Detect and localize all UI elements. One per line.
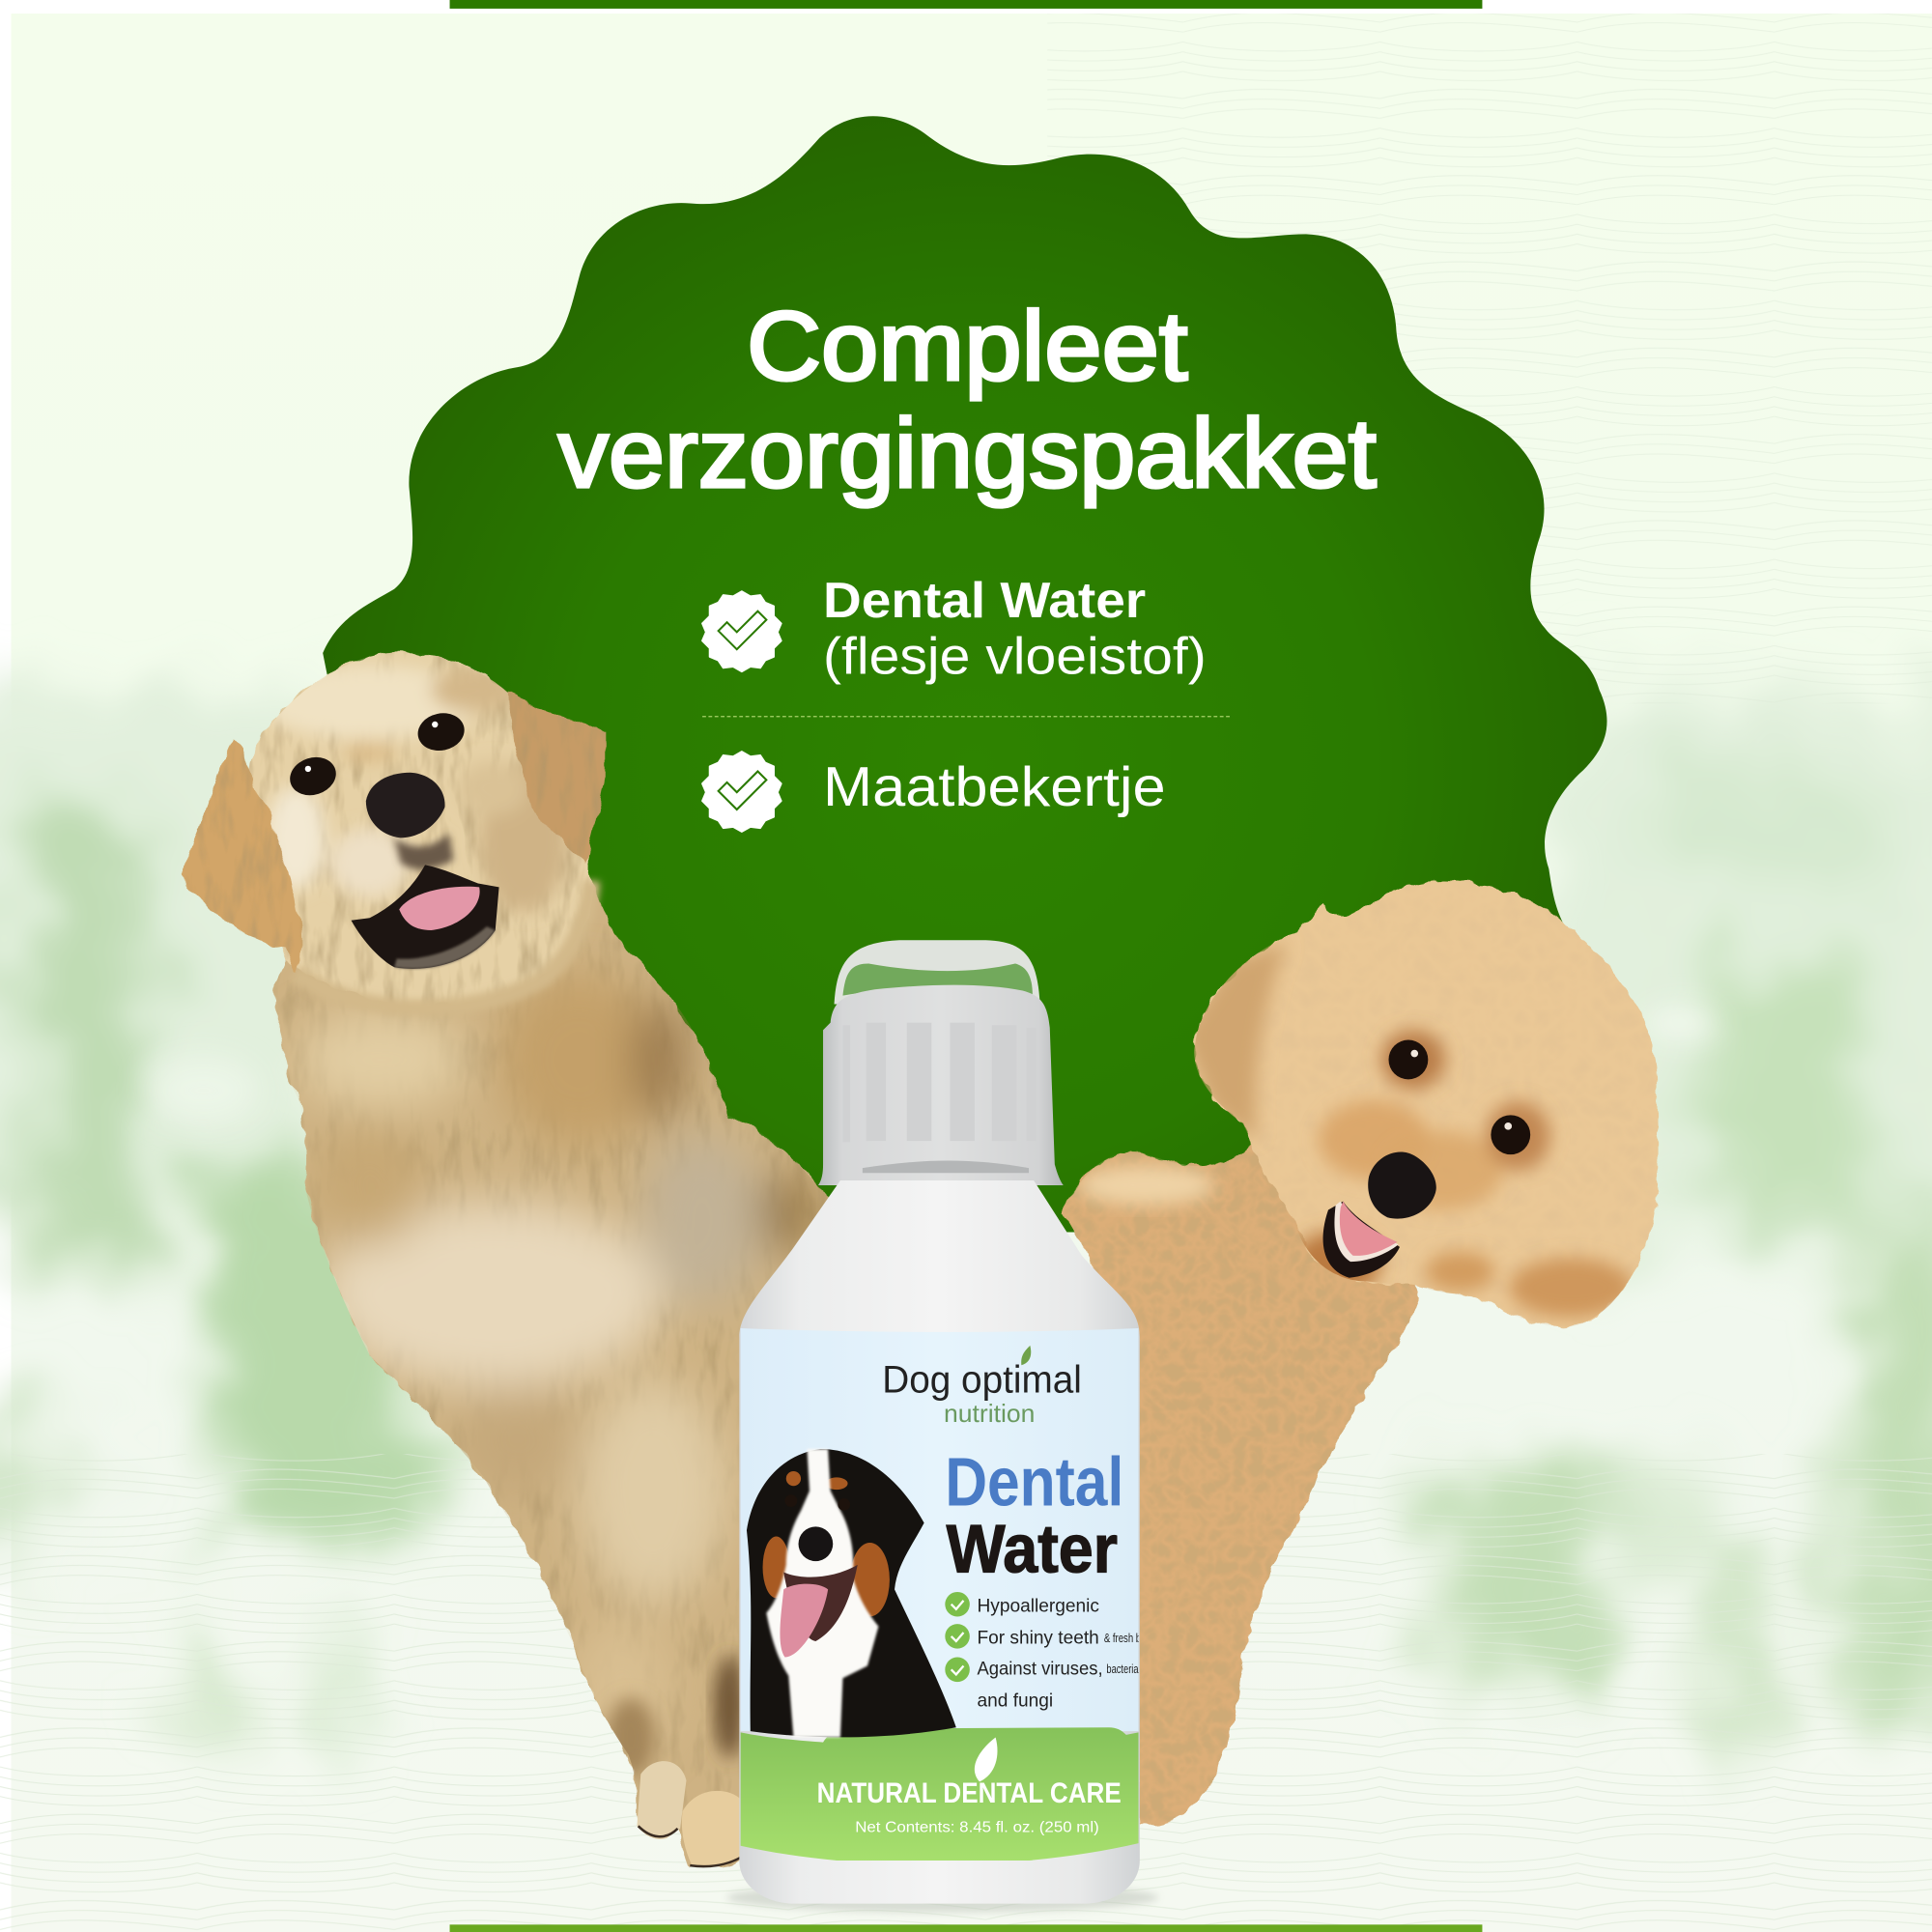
poodle eyes [1389,1040,1530,1154]
heading: verzorgingspakket [558,400,1377,508]
retriever body [273,856,828,1867]
bottle cap [818,985,1064,1185]
item text: Maatbekertje [823,756,1166,818]
label benefits list [945,1592,1141,1712]
neck blend under chin [296,881,591,1008]
brand logo [882,1346,1082,1428]
rear fur tuft [607,1698,656,1776]
label product name [945,1444,1123,1587]
retriever head [246,652,592,1008]
label benefits list: Hypoallergenic [977,1596,1099,1616]
heading [558,293,1377,508]
label tagline [817,1737,1122,1836]
label product name: Dental [945,1444,1123,1521]
bottle body [739,1180,1140,1904]
shadow between legs [715,1655,744,1758]
product bottle [727,940,1158,1913]
bottle ground shadow [727,1883,1158,1913]
poodle mouth [1323,1202,1400,1278]
item text [823,573,1207,686]
brand logo: nutrition [944,1401,1035,1428]
retriever ears [180,693,605,974]
blurred dog silhouettes in background [0,690,1932,1749]
bottle label [741,1328,1141,1865]
bottom accent bar [450,1924,1482,1932]
icon: green checks [945,1592,970,1682]
measuring cup on cap [835,940,1040,1005]
top accent bar [450,0,1482,9]
poodle nose [1368,1151,1436,1219]
check item: Dental Water [702,573,1207,686]
dog white blaze and chest [766,1449,878,1737]
wavy background pattern top right [1047,14,1932,703]
dog tongue [780,1584,828,1658]
check item: Maatbekertje [702,752,1166,832]
retriever mouth [352,833,499,969]
poodle tongue [1340,1202,1397,1256]
item text: (flesje vloeistof) [823,629,1207,686]
label product name: Water [947,1511,1118,1587]
icon: white leaf [975,1737,998,1781]
poodle [1062,881,1659,1825]
icon: logo leaf [1021,1346,1031,1365]
label green band [741,1727,1139,1865]
heading: Compleet [747,293,1188,401]
golden retriever [180,652,828,1867]
scalloped green badge [323,116,1607,1233]
dog mouth [783,1565,858,1641]
dog eyes and nose [784,1494,850,1561]
label benefits list: & fresh b [1104,1631,1141,1645]
icon: white check badge 2 [702,752,781,832]
wavy background pattern bottom [0,1454,1932,1932]
label benefits list: Against viruses, [977,1659,1103,1679]
label tagline: NATURAL DENTAL CARE [817,1777,1122,1809]
retriever paws [637,1761,743,1867]
icon: white check badge 1 [702,591,781,671]
item text: Dental Water [823,573,1146,629]
retriever tongue [399,887,480,930]
label dog illustration [747,1449,956,1737]
retriever nose [366,773,445,838]
label benefits list: and fungi [977,1691,1053,1712]
poodle body [1062,1146,1419,1825]
poodle head [1182,881,1659,1327]
brand logo: Dog optimal [882,1358,1082,1401]
dog tan patches [763,1471,890,1616]
label tagline: Net Contents: 8.45 fl. oz. (250 ml) [855,1820,1099,1836]
label benefits list: bacteria [1106,1662,1139,1676]
retriever eyes [285,709,468,801]
cap ribs [842,1023,1037,1142]
label benefits list: For shiny teeth [977,1629,1099,1649]
